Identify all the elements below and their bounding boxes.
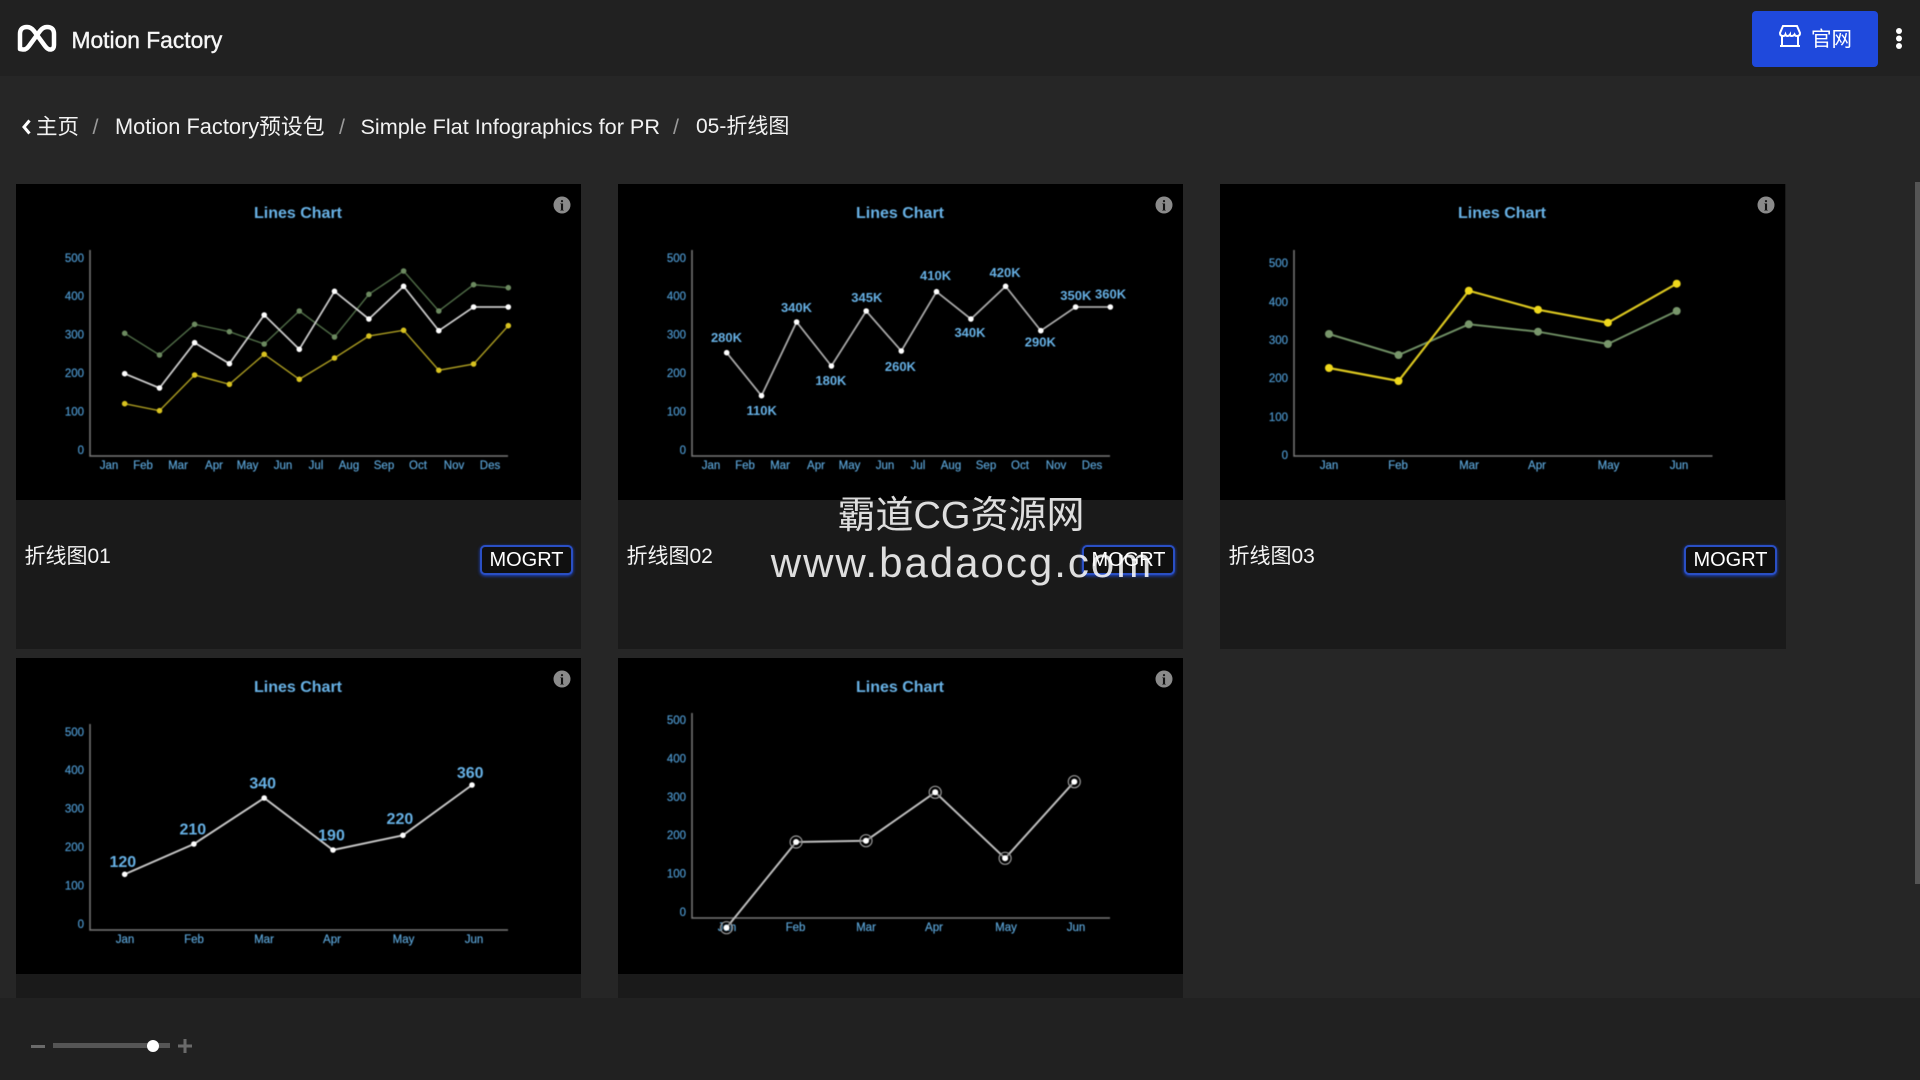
chart: three line chart with twelve months: 100: [65, 406, 84, 418]
chart: three line chart with twelve months: Apr: [205, 460, 223, 472]
chart: yellow and green lines, six months: Apr: [1528, 460, 1546, 472]
top header bar: [0, 0, 1920, 76]
chart: single line with K value labels: 350K: [1060, 288, 1092, 303]
crumb: product: Simple Flat Infographics for PR: [360, 114, 660, 139]
chart: single line with value labels: 200: [65, 842, 84, 854]
icon: zoom in: [178, 1039, 192, 1053]
chart: single line with ringed points: 300: [667, 792, 686, 804]
chart: single line with value labels: Jun: [465, 934, 483, 946]
chart: yellow and green lines, six months: 300: [1269, 335, 1288, 347]
chart: single line with value labels: 190: [318, 828, 345, 844]
chart: yellow and green lines, six months: [1220, 184, 1785, 500]
chart: single line with K value labels: Lines Chart: [856, 205, 945, 222]
chart: three line chart with twelve months: [16, 184, 581, 500]
chart: single line with value labels: 340: [249, 776, 276, 792]
chart: single line with ringed points: 400: [667, 754, 686, 766]
panel: card 折线图04: [16, 658, 581, 998]
chart: single line with K value labels: 200: [667, 368, 686, 380]
chart: single line with K value labels: Sep: [976, 460, 996, 472]
chart: single line with K value labels: 180K: [815, 373, 847, 388]
tag: MOGRT: MOGRT: [1693, 549, 1768, 571]
chart: yellow and green lines, six months: 0: [1282, 450, 1288, 462]
button label: 官网: [1811, 28, 1852, 51]
chart: three line chart with twelve months: 400: [65, 291, 84, 303]
panel: card 折线图02: [618, 184, 1183, 649]
chart: yellow and green lines, six months: Jun: [1670, 460, 1688, 472]
chart: single line with K value labels: May: [839, 460, 861, 472]
chart: three line chart with twelve months: 300: [65, 330, 84, 342]
chart: yellow and green lines, six months: Mar: [1459, 460, 1479, 472]
icon: info: [554, 670, 570, 688]
chart: single line with value labels: Mar: [254, 934, 274, 946]
crumb: home: 主页: [36, 115, 79, 139]
chart: single line with value labels: 400: [65, 765, 84, 777]
separator: /: [673, 115, 679, 139]
breadcrumb navigation: [22, 114, 789, 139]
chart: single line with K value labels: 340K: [781, 300, 813, 315]
chart: single line with value labels: 0: [78, 919, 84, 931]
chart: single line with ringed points: Mar: [856, 922, 876, 934]
chart: single line with value labels: Lines Chart: [254, 679, 343, 696]
chart: single line with value labels: Feb: [184, 934, 204, 946]
chart: single line with K value labels: 345K: [851, 290, 883, 305]
chart: single line with K value labels: [618, 184, 1183, 500]
chart: yellow and green lines, six months: 400: [1269, 297, 1288, 309]
chart: three line chart with twelve months: Lines Chart: [254, 205, 343, 222]
crumb: current folder: 05-折线图: [696, 115, 789, 138]
chart: single line with K value labels: Aug: [941, 460, 961, 472]
chart: single line with ringed points: 100: [667, 868, 686, 880]
separator: /: [339, 115, 345, 139]
chart: single line with K value labels: 290K: [1025, 334, 1056, 350]
chart: single line with value labels: 360: [457, 765, 484, 782]
icon: info: [1758, 196, 1774, 214]
chart: single line with value labels: 220: [387, 811, 413, 828]
chart: yellow and green lines, six months: 100: [1269, 412, 1288, 424]
chart: single line with K value labels: 410K: [920, 268, 952, 283]
chart: single line with K value labels: 280K: [711, 330, 743, 345]
chart: three line chart with twelve months: Feb: [133, 460, 153, 472]
tag: MOGRT: [1082, 545, 1175, 575]
watermark line 1: 霸道CG资源网: [837, 495, 1084, 537]
chart: three line chart with twelve months: Jul: [309, 460, 323, 472]
chart: single line with value labels: 210: [179, 822, 206, 838]
tag: MOGRT: [480, 545, 573, 575]
chart: single line with K value labels: Mar: [770, 460, 790, 472]
chart: single line with value labels: 120: [109, 854, 136, 871]
chart: single line with value labels: 300: [65, 804, 84, 816]
panel: card 折线图03: [1220, 184, 1786, 649]
card title: 折线图02: [626, 545, 713, 568]
chart: single line with ringed points: 0: [680, 907, 686, 919]
icon: zoom out: [31, 1045, 45, 1048]
card title: 折线图03: [1228, 545, 1315, 568]
bottom zoom bar: [0, 998, 1920, 1080]
chart: single line with ringed points: Feb: [786, 922, 805, 934]
chart: single line with K value labels: Jan: [702, 460, 720, 472]
chart: yellow and green lines, six months: Jan: [1320, 460, 1338, 472]
chart: yellow and green lines, six months: Lines Chart: [1458, 205, 1547, 222]
chart: single line with K value labels: 420K: [990, 265, 1021, 280]
chart: single line with K value labels: 340K: [954, 325, 986, 340]
chart: single line with K value labels: 0: [680, 445, 686, 457]
chart: three line chart with twelve months: 200: [65, 368, 84, 380]
brand name: Motion Factory: [72, 27, 222, 53]
slider thumb: [147, 1040, 159, 1052]
chart: single line with ringed points: [618, 658, 1183, 974]
chart: three line chart with twelve months: Mar: [168, 460, 188, 472]
scrollbar: [1915, 182, 1920, 884]
chart: single line with value labels: 500: [65, 727, 84, 739]
panel: card 折线图01: [16, 184, 581, 649]
chart: three line chart with twelve months: May: [237, 460, 259, 472]
chart: single line with ringed points: Jan: [718, 922, 736, 934]
chart: single line with K value labels: Nov: [1046, 460, 1066, 472]
tag: MOGRT: MOGRT: [489, 549, 564, 571]
icon: info: [1156, 196, 1172, 214]
icon: info: [1156, 670, 1172, 688]
chart: three line chart with twelve months: Nov: [444, 460, 464, 472]
chart: single line with value labels: 100: [65, 880, 84, 892]
chart: single line with K value labels: Des: [1082, 460, 1102, 472]
tag: MOGRT: [1684, 545, 1777, 575]
chart: single line with value labels: [16, 658, 581, 974]
chart: single line with ringed points: Lines Chart: [856, 679, 945, 696]
chart: single line with K value labels: 260K: [885, 359, 917, 374]
chart: single line with K value labels: 100: [667, 406, 686, 418]
chart: yellow and green lines, six months: 200: [1269, 373, 1288, 385]
chart: single line with ringed points: Apr: [925, 922, 943, 934]
chart: three line chart with twelve months: 500: [65, 253, 84, 265]
chart: single line with K value labels: Oct: [1011, 460, 1030, 472]
chart: single line with K value labels: 300: [667, 330, 686, 342]
separator: /: [92, 115, 98, 139]
chart: three line chart with twelve months: 0: [78, 445, 84, 457]
chart: single line with value labels: Jan: [116, 934, 134, 946]
chart: three line chart with twelve months: Sep: [374, 460, 394, 472]
chart: single line with K value labels: 110K: [747, 403, 777, 418]
icon: Motion Factory logo: [18, 24, 56, 52]
chart: single line with ringed points: 500: [667, 715, 686, 727]
watermark line 2: www.badaocg.com: [771, 539, 1153, 586]
tag: MOGRT: MOGRT: [1091, 549, 1166, 571]
chart: three line chart with twelve months: Aug: [339, 460, 359, 472]
chart: yellow and green lines, six months: 500: [1269, 258, 1288, 270]
chart: single line with K value labels: 400: [667, 291, 686, 303]
chart: yellow and green lines, six months: Feb: [1388, 460, 1408, 472]
icon: more menu: [1896, 28, 1902, 49]
chart: single line with ringed points: May: [995, 922, 1017, 934]
icon: back chevron: [22, 120, 31, 134]
chart: three line chart with twelve months: Des: [480, 460, 500, 472]
zoom slider: [53, 1043, 170, 1048]
chart: single line with value labels: May: [393, 934, 415, 946]
chart: single line with ringed points: 200: [667, 830, 686, 842]
crumb: preset pack: Motion Factory预设包: [115, 114, 325, 139]
icon: info: [554, 196, 570, 214]
chart: yellow and green lines, six months: May: [1598, 460, 1620, 472]
icon: store: [1779, 25, 1801, 47]
chart: single line with value labels: Apr: [323, 934, 341, 946]
chart: three line chart with twelve months: Jan: [100, 460, 118, 472]
chart: single line with K value labels: 500: [667, 253, 686, 265]
chart: single line with K value labels: 360K: [1095, 286, 1127, 302]
chart: single line with K value labels: Jun: [876, 460, 894, 472]
chart: single line with K value labels: Feb: [735, 460, 755, 472]
chart: single line with ringed points: Jun: [1067, 922, 1085, 934]
chart: single line with K value labels: Apr: [807, 460, 825, 472]
chart: single line with K value labels: Jul: [911, 460, 925, 472]
watermark: [770, 495, 1153, 586]
chart: three line chart with twelve months: Oct: [409, 460, 428, 472]
chart: three line chart with twelve months: Jun: [274, 460, 292, 472]
panel: card 折线图05: [618, 658, 1183, 998]
card title: 折线图01: [24, 545, 111, 568]
official site button: [1752, 11, 1878, 67]
